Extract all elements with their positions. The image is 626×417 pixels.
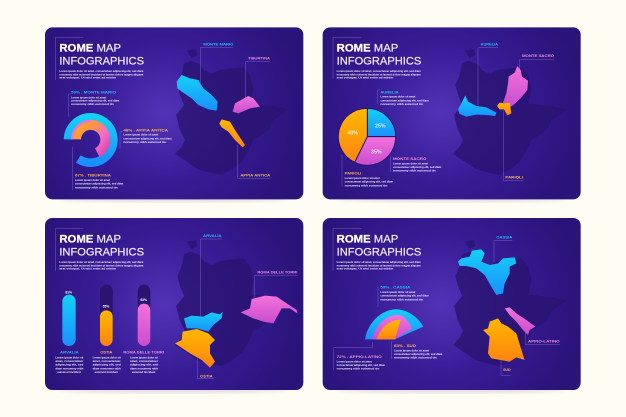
callout: Monte Mario share: 59% . MONTE MARIO [71,91,116,95]
region: Arvalia [184,234,223,332]
intro text: erat volutpat. Ut wisi enim ad minim [59,267,116,271]
bar: Arvalia: diam nonummy nibh [55,366,83,370]
title: INFOGRAPHICS [59,246,144,258]
callout: Cassia share [378,286,429,307]
callout: Monte Mario share: consectetuer adipiscing elit, sed diam [71,99,120,103]
callout: Appia Antica share [120,129,172,148]
callout: Tiburtina share: nonummy nibh euismod tin [75,185,118,189]
callout: Appio-Latino share: nonummy nibh euismod tin [337,367,380,371]
bar: Arvalia: euismod tincidunt [57,370,81,374]
region: Ostia: OSTIA [200,374,213,378]
intro text: nonummy nibh euismod tincidunt ut laoreet dolore magna aliquam [59,72,144,76]
bar: Roma delle Torri: 63% [140,298,147,302]
panel: bar chart map, bottom left [45,218,303,393]
region: Cassia [458,235,516,295]
title: ROME MAP [59,234,121,246]
intro text: erat volutpat. Ut wisi enim ad minim [337,76,394,80]
intro text: nonummy nibh euismod tincidunt ut laoreet dolore magna aliquam [337,72,421,76]
bar: Roma delle Torri [123,285,164,374]
callout: Monte Sacro: MONTE SACRO [393,157,427,161]
bar: Roma delle Torri: diam nonummy nibh [130,366,158,370]
callout: Appio-Latino share: Lorem ipsum dolor sit amet [337,359,372,363]
callout: Cassia share: consectetuer adipiscing elit, sed diam [380,294,429,298]
callout: Monte Sacro: Lorem ipsum dolor sit amet [393,161,428,165]
region: Tiburtina: TIBURTINA [248,57,270,61]
bar: Arvalia: adipiscing elit, sed [55,363,84,367]
callout: Appia Antica share: nonummy nibh euismod tin [123,140,166,144]
bar: Arvalia [55,290,84,374]
region: Roma delle Torri [241,270,297,323]
region: Appia Antica: APPIA ANTICA [240,173,271,177]
callout: Cassia share: Lorem ipsum dolor sit amet [380,290,415,294]
intro text: erat volutpat. Ut wisi enim ad minim [59,76,116,80]
bar: Roma delle Torri: adipiscing elit, sed [130,363,158,367]
title: ROME MAP [337,234,398,246]
bar: Ostia: amet, consectetuer [93,359,122,363]
region: Parioli [497,103,523,181]
map silhouette [175,49,288,175]
callout: Aurelia: AURELIA [380,90,399,94]
callout: Sud share: nonummy nibh euismod tin [394,356,437,360]
pie chart: 40% [347,131,358,137]
intro text [59,69,144,80]
region: Sud [483,318,525,375]
callout: Sud share: 83% . SUD [394,344,416,348]
callout: Monte Sacro: consectetuer adipiscing elit, sed diam [393,165,442,169]
bar: Ostia: OSTIA [100,350,113,354]
region: Monte Mario [177,42,234,111]
callout: Monte Sacro [391,157,442,173]
region: Monte Mario: MONTE MARIO [203,42,234,46]
intro text: Lorem ipsum dolor sit amet, consectetuer adipiscing elit, sed diam [337,260,421,264]
fan chart [365,309,423,339]
callout: Tiburtina share [72,147,124,190]
intro text [59,260,144,271]
bar: Ostia: 55% [103,305,109,309]
callout: Monte Sacro: nonummy nibh euismod tin [393,169,436,173]
callout: Parioli [342,155,393,187]
bar: Arvalia: 81% [65,290,72,294]
title [59,43,144,67]
callout: Parioli: PARIOLI [345,172,361,176]
callout: Aurelia: nonummy nibh euismod tin [380,102,423,106]
callout: Monte Mario share [68,91,120,117]
bar: Roma delle Torri: Lorem ipsum dolor sit [130,355,158,359]
callout: Sud share [391,341,443,360]
region: Aurelia: AURELIA [481,43,498,47]
callout: Aurelia: Lorem ipsum dolor sit amet [380,95,415,99]
title: ROME MAP [337,43,398,55]
title [337,234,422,258]
callout: Appia Antica share: Lorem ipsum dolor sit amet [123,133,158,137]
panel: pie chart map, top right [323,27,581,202]
callout: Parioli: nonummy nibh euismod tin [345,183,388,187]
intro text: Lorem ipsum dolor sit amet, consectetuer adipiscing elit, sed diam [59,260,144,264]
region: Roma delle Torri: ROMA DELLE TORRI [257,270,297,274]
bar: Arvalia: ARVALIA [60,350,79,354]
callout: Appio-Latino share: consectetuer adipiscing elit, sed diam [337,363,385,367]
callout: Tiburtina share: 67% . TIBURTINA [75,174,111,178]
region: Appio-Latino [505,307,560,345]
intro text: Lorem ipsum dolor sit amet, consectetuer adipiscing elit, sed diam [337,69,421,73]
region: Ostia [175,329,215,379]
callout: Sud share: Lorem ipsum dolor sit amet [394,348,429,352]
bar: Ostia: euismod tincidunt [95,370,118,374]
bar: Arvalia: amet, consectetuer [55,359,84,363]
pie chart [338,108,396,165]
callout: Parioli: Lorem ipsum dolor sit amet [345,176,380,180]
pie chart: 25% [375,123,386,129]
title [337,43,422,67]
bar: Roma delle Torri: ROMA DELLE TORRI [123,350,164,354]
intro text: nonummy nibh euismod tincidunt ut laoreet dolore magna aliquam [59,263,144,267]
region: Tiburtina [233,57,270,113]
callout: Cassia share: nonummy nibh euismod tin [380,297,423,301]
callout: Aurelia: consectetuer adipiscing elit, sed diam [380,98,429,102]
callout: Cassia share: 59% . CASSIA [380,286,411,290]
title: ROME MAP [59,43,121,55]
callout: Aurelia [378,90,429,106]
title [59,234,144,258]
panel: fan chart map, bottom right [323,218,581,393]
callout: Parioli: consectetuer adipiscing elit, sed diam [345,180,393,184]
intro text [337,260,421,271]
callout: Tiburtina share: consectetuer adipiscing elit, sed diam [75,182,124,186]
callout: Appio-Latino share [334,342,385,371]
bar: Ostia: Lorem ipsum dolor sit [93,355,121,359]
title: INFOGRAPHICS [59,55,144,67]
intro text: erat volutpat. Ut wisi enim ad minim [337,267,394,271]
bar: Arvalia: Lorem ipsum dolor sit [55,355,83,359]
intro text: nonummy nibh euismod tincidunt ut laoreet dolore magna aliquam [337,263,421,267]
map silhouette [453,49,566,175]
bar: Ostia: adipiscing elit, sed [93,363,121,367]
region: Cassia: CASSIA [496,235,513,239]
callout: Monte Mario share: Lorem ipsum dolor sit amet [71,95,106,99]
bar: Ostia [93,285,122,374]
bar: Ostia: diam nonummy nibh [93,366,121,370]
region: Appio-Latino: APPIO-LATINO [528,340,560,344]
region: Parioli: PARIOLI [505,176,523,180]
callout: Appia Antica share: consectetuer adipiscing elit, sed diam [123,136,172,140]
bar: Roma delle Torri: amet, consectetuer [130,359,159,363]
region: Monte Sacro [503,54,554,107]
pie chart: 35% [371,149,382,155]
callout: Monte Mario share: nonummy nibh euismod tin [71,102,114,106]
region: Arvalia: ARVALIA [203,234,222,238]
map silhouette [453,240,566,366]
region: Aurelia [458,43,498,117]
region: Sud: SUD [503,368,511,372]
panel: arc chart map, top left [45,27,303,202]
bar: Roma delle Torri: euismod tincidunt [132,370,155,374]
intro text: Lorem ipsum dolor sit amet, consectetuer adipiscing elit, sed diam [59,69,144,73]
intro text [337,69,421,80]
callout: Appia Antica share: 48% . APPIA ANTICA [123,129,168,133]
callout: Tiburtina share: Lorem ipsum dolor sit amet [75,178,110,182]
region: Appia Antica [219,119,271,178]
title: INFOGRAPHICS [337,55,422,67]
title: INFOGRAPHICS [337,246,422,258]
callout: Sud share: consectetuer adipiscing elit, sed diam [394,352,443,356]
map silhouette [175,240,288,366]
region: Monte Sacro: MONTE SACRO [522,54,554,58]
arc chart [68,117,113,163]
callout: Appio-Latino share: 72% . APPIO-LATINO [337,355,382,359]
